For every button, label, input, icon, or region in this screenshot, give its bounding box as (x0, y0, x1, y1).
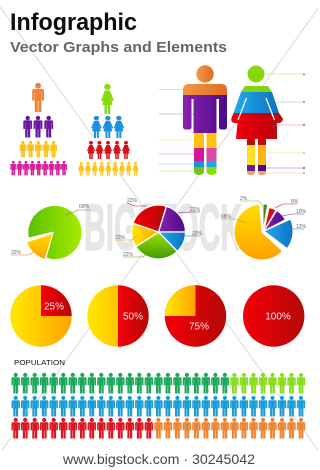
pie chart 3: 12% (296, 224, 307, 230)
pie chart 3: 68% (221, 214, 232, 220)
large male figure (183, 65, 227, 175)
pie chart 1 (11, 204, 91, 260)
footer url: www.bigstock.com · 30245042 (62, 451, 255, 467)
disc 100%: 100% (265, 312, 291, 322)
pie chart 3: 10% (296, 209, 307, 215)
pie chart 2: 22% (127, 198, 138, 204)
disc 50%: 50% (123, 312, 143, 322)
pie chart 2: 22% (123, 252, 134, 258)
title: Infographic (10, 9, 137, 36)
disc 25% (10, 285, 72, 347)
disc 75% (165, 285, 226, 347)
pie chart 1: 69% (79, 204, 90, 210)
female figure leader lines (265, 74, 305, 174)
pie chart 3 (221, 196, 307, 260)
population heading: POPULATION (14, 358, 65, 367)
subtitle: Vector Graphs and Elements (10, 39, 227, 56)
disc 50% (87, 285, 149, 347)
pie chart 2 (115, 198, 203, 259)
pie chart 2: 32% (192, 231, 203, 237)
pie chart 3: 2% (240, 196, 248, 202)
population row blue (12, 396, 305, 416)
disc 100% (243, 285, 304, 347)
pie chart 2: 22% (190, 207, 201, 213)
disc 75%: 75% (189, 322, 209, 332)
pie chart 3: 8% (291, 199, 299, 205)
male pyramid (10, 83, 67, 175)
large female figure (231, 66, 283, 175)
pie chart 1: 32% (11, 250, 22, 256)
population row red and orange (12, 418, 305, 438)
population row green (12, 373, 305, 394)
male figure leader lines (159, 90, 198, 171)
pie chart 2: 22% (115, 235, 126, 241)
disc 25%: 25% (44, 302, 64, 312)
female pyramid (78, 84, 139, 176)
